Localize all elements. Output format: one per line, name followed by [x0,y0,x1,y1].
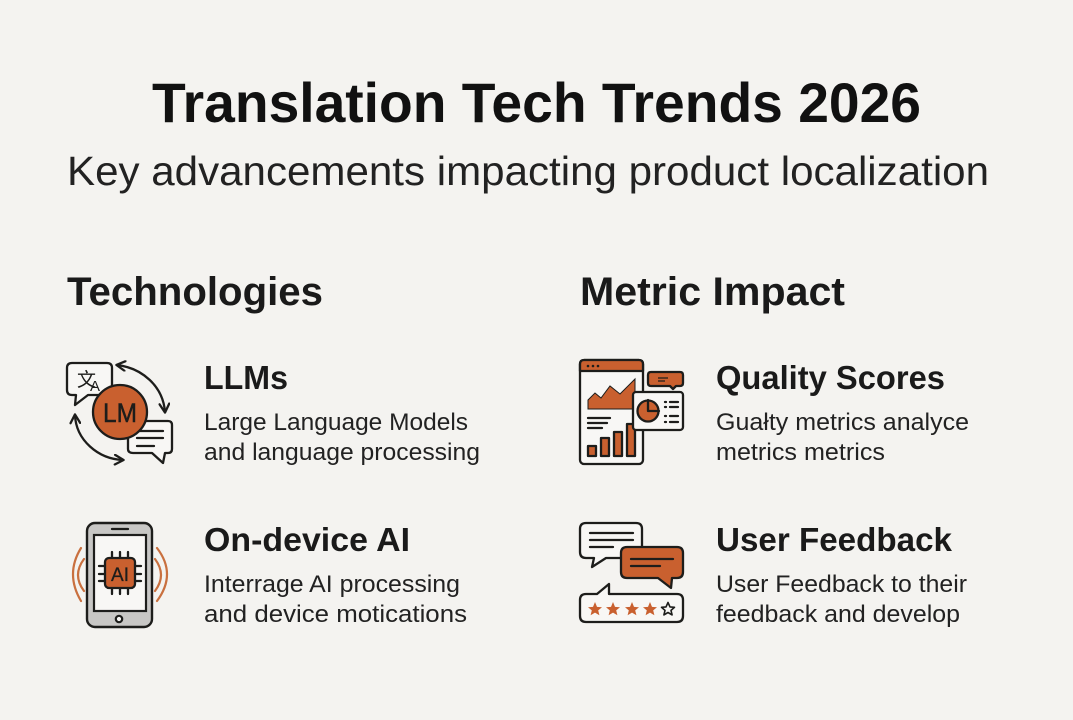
text: LLMs: and language processing [204,439,480,466]
text: quality scores: metrics metrics [716,439,885,466]
subtitle: Key advancements impacting product localization [67,148,989,194]
text: quality scores [716,359,969,466]
text: on-device AI: and device motications [204,601,467,628]
text: quality scores: Guałty metrics analyce [716,409,969,436]
icon: on-device AI phone: AI [111,565,129,586]
icon: quality dashboard [580,360,683,464]
text: user feedback: feedback and develop [716,601,960,628]
icon: LLM translation cycle: A [90,378,100,395]
text: on-device AI: On-device AI [204,521,410,558]
text: LLMs: LLMs [204,359,288,396]
icon: LLM translation cycle: 文 [77,369,96,391]
heading: technologies: Technologies [67,270,323,314]
heading: metric impact: Metric Impact [580,270,845,314]
text: LLMs [204,359,480,466]
text: LLMs: Large Language Models [204,409,468,436]
text: user feedback [716,521,967,628]
icon: user feedback [580,523,683,622]
text: quality scores: Quality Scores [716,359,945,396]
text: user feedback: User Feedback to their [716,571,967,598]
title: Translation Tech Trends 2026 [152,71,921,134]
icon: LLM translation cycle: LM [103,398,137,428]
text: on-device AI [204,521,467,628]
icon: LLM translation cycle [67,363,172,463]
text: user feedback: User Feedback [716,521,953,558]
text: on-device AI: Interrage AI processing [204,571,460,598]
icon: on-device AI phone [73,523,167,627]
